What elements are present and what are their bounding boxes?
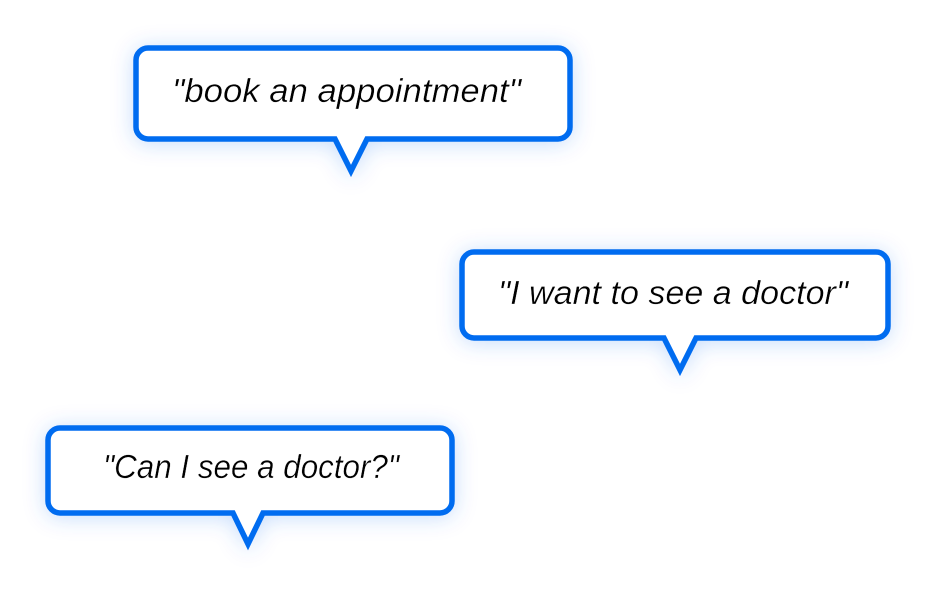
bubble text: "Can I see a doctor?" — [103, 448, 400, 485]
speech bubble: I want to see a doctor — [462, 252, 888, 370]
bubble outline — [136, 48, 570, 171]
bubble text: "I want to see a doctor" — [498, 274, 849, 311]
bubble outline — [462, 252, 888, 370]
bubble outline — [48, 428, 452, 544]
speech bubble: Can I see a doctor? — [48, 428, 452, 544]
speech bubble: book an appointment — [136, 48, 570, 171]
bubble text: "book an appointment" — [172, 72, 522, 109]
